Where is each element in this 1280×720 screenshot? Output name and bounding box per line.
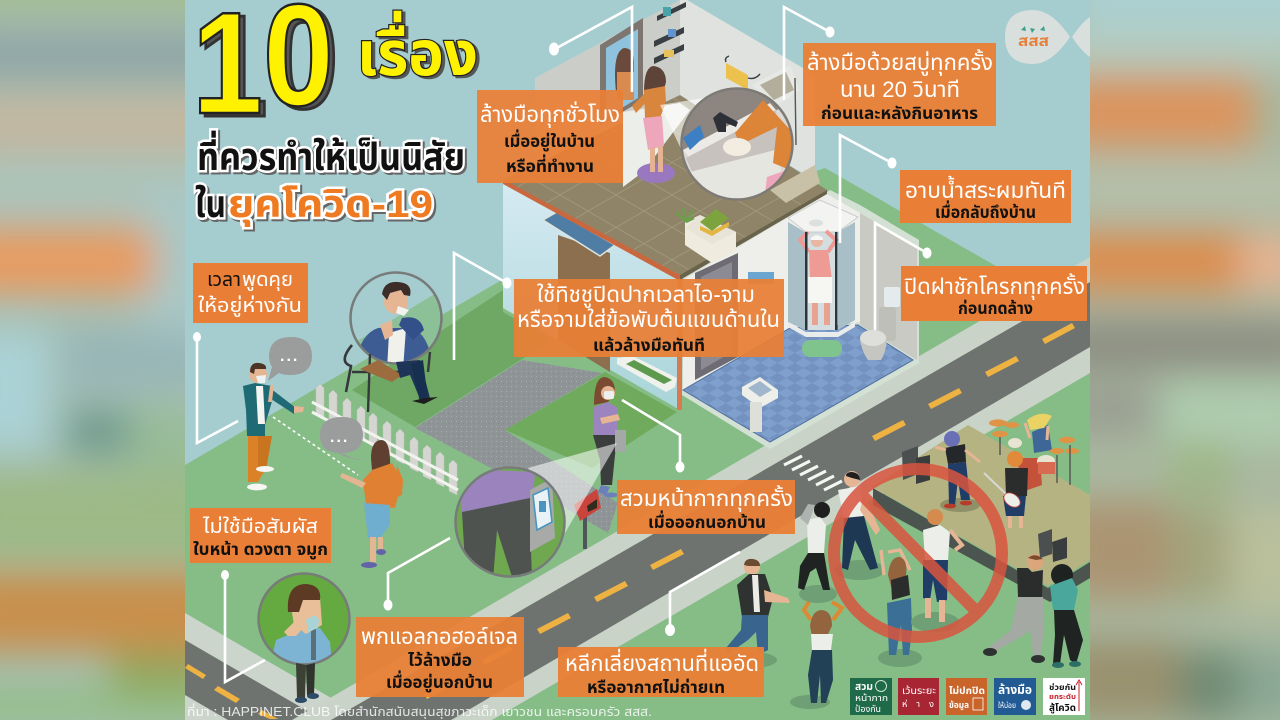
label: keep distance — [193, 263, 308, 323]
crowd: woman arms raised — [790, 600, 842, 709]
label: close toilet lid: ปิดฝาชักโครกทุกครั้ง — [904, 272, 1085, 300]
label: cover cough: แล้วล้างมือทันที — [593, 336, 705, 355]
label: cover cough — [514, 279, 784, 357]
subtitle line 2: ใน — [195, 184, 226, 226]
pillar — [677, 272, 682, 410]
lawn patch with bench — [352, 290, 525, 427]
label: avoid crowds: หลีกเลี่ยงสถานที่แออัด — [565, 648, 759, 676]
label: keep distance: เวลา — [207, 269, 241, 291]
badge: wash hands: ให้บ่อย — [998, 700, 1016, 710]
road: side street lower left — [185, 613, 330, 720]
label: avoid crowds: หรืออากาศไม่ถ่ายเท — [587, 677, 725, 697]
label: wash hands hourly: เมื่ออยู่ในบ้าน — [504, 129, 595, 152]
front door — [543, 212, 615, 372]
light cone from bag to close-up — [528, 443, 617, 533]
source credit: ที่มา : HAPPINET.CLUB โดยสำนักสนับสนุนสุขภาวะเด็ก เยาวชน และครอบครัว สสส. — [187, 703, 652, 719]
bathroom shelves — [654, 2, 686, 64]
crowd: man in vest and grey pants — [983, 554, 1045, 663]
crosswalk — [784, 456, 842, 490]
label: shower — [900, 170, 1071, 223]
badge: wear mask: ป้องกัน — [855, 704, 881, 714]
woman with bag — [593, 377, 626, 498]
label: carry alcohol gel: ไว้ล้างมือ — [408, 651, 472, 670]
bathroom side wall — [860, 213, 917, 360]
fence — [312, 384, 458, 495]
light cone from woman to close-up — [660, 90, 753, 153]
badge: don't hide information: ไม่ปกปิด — [949, 684, 985, 697]
badge: raise the level: ช่วยกัน — [1049, 681, 1076, 692]
speech bubble 2 — [320, 417, 364, 460]
crowd: woman in teal top — [1050, 564, 1083, 668]
label: keep distance: พูดคุย — [242, 269, 293, 292]
counter and basin — [623, 103, 690, 187]
title: 10 — [192, 0, 339, 147]
leader lines — [197, 7, 927, 682]
badge: wash hands — [994, 678, 1036, 715]
close-up: man coughing — [350, 272, 442, 370]
label: shower: เมื่อกลับถึงบ้าน — [935, 200, 1036, 222]
upper right wall — [680, 0, 815, 180]
towel — [725, 56, 760, 90]
badge: raise the level: สู้โควิด — [1049, 701, 1076, 714]
label: keep distance: ให้อยู่ห่างกัน — [198, 294, 302, 318]
man legs below close-up — [295, 663, 319, 703]
badge: raise the level — [1043, 678, 1085, 715]
man on bench — [345, 345, 438, 412]
badge: raise the level: ยกระดับ — [1049, 693, 1076, 701]
woman in orange — [340, 440, 403, 568]
crowd: person in white dancing — [835, 471, 885, 580]
label: avoid crowds — [558, 647, 764, 697]
close-up: alcohol gel on bag — [456, 468, 564, 580]
label: wear a mask: สวมหน้ากากทุกครั้ง — [620, 484, 793, 512]
wash basin — [742, 377, 778, 432]
showering man — [800, 231, 836, 325]
label: wash with soap: ล้างมือด้วยสบู่ทุกครั้ง — [807, 48, 993, 76]
man talking with mask — [243, 363, 304, 490]
mailbox — [574, 489, 601, 549]
label: wash hands hourly: ล้างมือทุกชั่วโมง — [480, 100, 620, 128]
corner shower tray — [770, 165, 820, 203]
crowd: woman in black top — [878, 550, 922, 667]
stage platform — [872, 425, 1090, 602]
bathroom door — [695, 253, 738, 380]
badge: wear mask — [850, 678, 892, 715]
logo: สสส: สสส — [1018, 33, 1049, 50]
house: upper floor — [503, 0, 827, 281]
band: drum kit and drummer — [989, 414, 1079, 492]
left outer wall — [503, 180, 680, 410]
badge: keep distance: เว้นระยะ — [902, 685, 936, 697]
lawn patch beside path — [505, 372, 677, 468]
speakers — [902, 446, 1067, 562]
distance dotted line — [273, 417, 358, 475]
badge: wash hands: ล้างมือ — [998, 683, 1032, 697]
label: don't touch face: ใบหน้า ดวงตา จมูก — [193, 540, 328, 560]
shower cabin — [788, 200, 858, 337]
label: wash hands hourly: หรือที่ทำงาน — [506, 154, 594, 176]
crowd: man in white ginger hair — [911, 509, 962, 632]
ground: lawn — [185, 168, 1090, 720]
badge: keep distance: ห่าง — [902, 699, 934, 709]
speech bubble 2: ... — [330, 429, 349, 446]
close-up: man with face mask — [258, 574, 350, 665]
label: carry alcohol gel — [356, 617, 524, 697]
band: guitarist — [984, 451, 1028, 528]
badge: keep distance — [898, 678, 939, 715]
upper left wall — [535, 0, 680, 112]
badge: don't hide information — [946, 678, 987, 715]
purple mat — [637, 163, 675, 183]
logo: สสส — [1005, 10, 1090, 64]
label: close toilet lid — [901, 266, 1087, 321]
upper floor slab — [503, 95, 827, 275]
crowd: man pointing — [726, 559, 790, 668]
speech bubble 1 — [268, 337, 312, 381]
main infographic panel — [185, 0, 1090, 720]
road: main diagonal street — [292, 257, 1090, 720]
label: wear a mask — [617, 480, 795, 534]
label: wash hands hourly — [477, 90, 623, 183]
close-up: hand washing — [680, 80, 800, 200]
mirror — [600, 18, 643, 112]
toilet — [860, 287, 900, 360]
label: close toilet lid: ก่อนกดล้าง — [958, 298, 1033, 318]
house: ground floor — [503, 180, 919, 449]
label: wash with soap — [803, 43, 996, 126]
label: wear a mask: เมื่อออกนอกบ้าน — [648, 510, 766, 532]
bathroom base lip — [682, 190, 919, 449]
label: carry alcohol gel: พกแอลกอฮอล์เจล — [361, 624, 518, 649]
woman washing hands — [632, 66, 666, 172]
shower corner fixture — [760, 72, 797, 145]
crowd: person in white crouching — [798, 502, 837, 603]
planter box — [617, 356, 677, 392]
band: singer — [935, 431, 980, 512]
badge: wear mask: สวม — [855, 681, 873, 693]
label: cover cough: หรือจามใส่ข้อพับต้นแขนด้านใน — [517, 307, 780, 332]
plant and side table — [676, 208, 736, 263]
speech bubble 1: ... — [280, 348, 299, 365]
label: don't touch face: ไม่ใช้มือสัมผัส — [202, 515, 318, 538]
bathroom back wall — [683, 194, 860, 390]
label: cover cough: ใช้ทิชชูปิดปากเวลาไอ-จาม — [537, 282, 755, 308]
label: don't touch face — [190, 508, 331, 563]
label: wash with soap: นาน 20 วินาที — [840, 77, 960, 102]
subtitle line 1: ที่ควรทำให้เป็นนิสัย — [197, 130, 465, 179]
no-entry prohibition sign — [834, 469, 1002, 637]
badge: don't hide information: ข้อมูล — [949, 700, 969, 710]
towel rail — [748, 272, 774, 279]
gravel path — [415, 360, 618, 533]
label: wash with soap: ก่อนและหลังกินอาหาร — [821, 103, 978, 123]
blurred background: left side — [0, 0, 185, 720]
subtitle line 2: ยุคโควิด-19 — [228, 184, 433, 227]
green bath mat — [802, 340, 842, 357]
label: carry alcohol gel: เมื่ออยู่นอกบ้าน — [386, 670, 493, 693]
badge: wear mask: หน้ากาก — [855, 693, 888, 703]
label: shower: อาบน้ำสระผมทันที — [905, 175, 1066, 203]
bathroom floor — [683, 325, 913, 442]
blurred background: right side — [1090, 12, 1280, 720]
title: เรื่อง: เรื่อง — [357, 10, 478, 89]
leader line end dots — [193, 26, 932, 636]
